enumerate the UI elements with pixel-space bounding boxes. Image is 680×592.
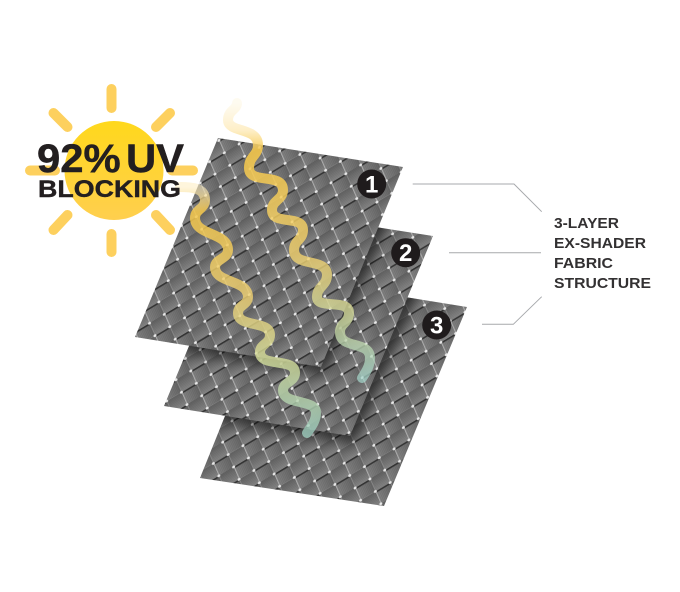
fabric structure label: FABRIC [554,255,613,272]
fabric structure label [554,215,651,292]
badge 3: 3 [430,312,443,340]
sun icon [30,89,193,252]
fabric structure label: EX-SHADER [554,235,646,252]
sun rays [30,89,193,252]
badge 1 [357,170,386,198]
leader lines [413,184,542,324]
sun disc [64,121,164,220]
heading: 92% UV blocking: 92% UV [37,137,184,181]
badge 3 [422,310,451,340]
layer 2 fabric panel [164,209,433,436]
uv wave left [180,187,316,433]
heading: 92% UV blocking [37,137,184,203]
heading: 92% UV blocking: BLOCKING [38,176,181,203]
layer 3 fabric panel [200,288,467,506]
badge 2 [391,238,420,267]
uv wave right [228,103,370,378]
fabric structure label: STRUCTURE [554,275,651,292]
fabric structure label: 3-LAYER [554,215,619,232]
badge 2: 2 [399,240,412,267]
layer 1 fabric panel [135,138,403,367]
badge 1: 1 [365,172,378,198]
